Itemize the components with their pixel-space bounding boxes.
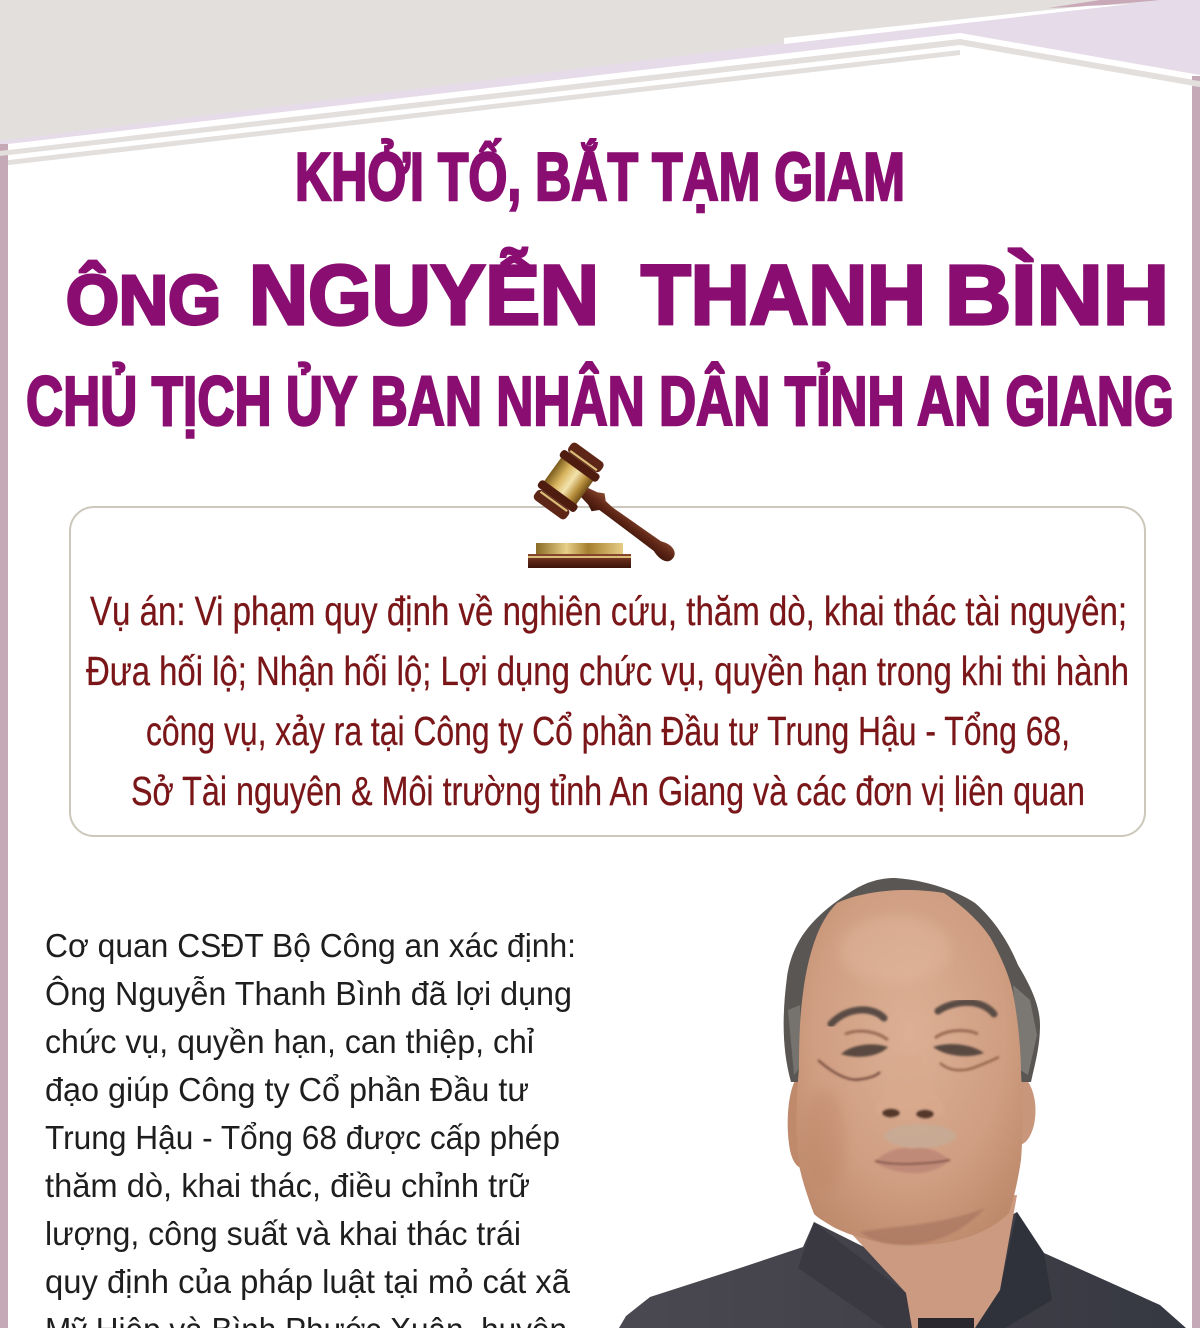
face [796, 890, 1022, 1245]
eyes [818, 1031, 999, 1080]
body paragraph: đạo giúp Công ty Cổ phần Đầu tư [45, 1071, 529, 1108]
forehead highlight [840, 916, 950, 984]
body paragraph: Trung Hậu - Tổng 68 được cấp phép [45, 1119, 560, 1156]
header background banner [0, 0, 1200, 170]
body paragraph: quy định của pháp luật tại mỏ cát xã [45, 1263, 571, 1300]
title line 2: name: BÌNH [945, 248, 1169, 342]
neck [825, 1195, 1017, 1328]
portrait of Nguyễn Thanh Bình [619, 878, 1186, 1328]
body paragraph: lượng, công suất và khai thác trái [45, 1215, 521, 1252]
title line 2: name [66, 248, 1169, 342]
cheek shading [805, 1090, 845, 1190]
title line 2: name: ÔNG [66, 260, 221, 339]
nose [875, 1055, 945, 1120]
body paragraph: Ông Nguyễn Thanh Bình đã lợi dụng [45, 975, 572, 1012]
body paragraph [45, 927, 576, 1328]
title line 2: name: THANH [641, 248, 926, 342]
body paragraph: chức vụ, quyền hạn, can thiệp, chỉ [45, 1023, 535, 1060]
collar [798, 1222, 912, 1328]
right page border [1192, 76, 1200, 1328]
ears [788, 1075, 806, 1168]
body paragraph: Cơ quan CSĐT Bộ Công an xác định: [45, 927, 576, 964]
body paragraph: thăm dò, khai thác, điều chỉnh trữ [45, 1167, 530, 1204]
title line 2: name: NGUYỄN [249, 248, 599, 342]
left page border [0, 144, 8, 1328]
shirt [619, 1212, 1186, 1328]
hair [784, 878, 1040, 1082]
title line 1: KHỞI TỐ, BẮT TẠM GIAM [295, 138, 905, 215]
case description text [86, 588, 1129, 814]
case description panel [70, 507, 1145, 836]
icon: judge gavel [528, 439, 694, 586]
mouth [875, 1124, 956, 1173]
eyebrows [831, 1002, 994, 1024]
chin shadow [860, 1208, 985, 1245]
